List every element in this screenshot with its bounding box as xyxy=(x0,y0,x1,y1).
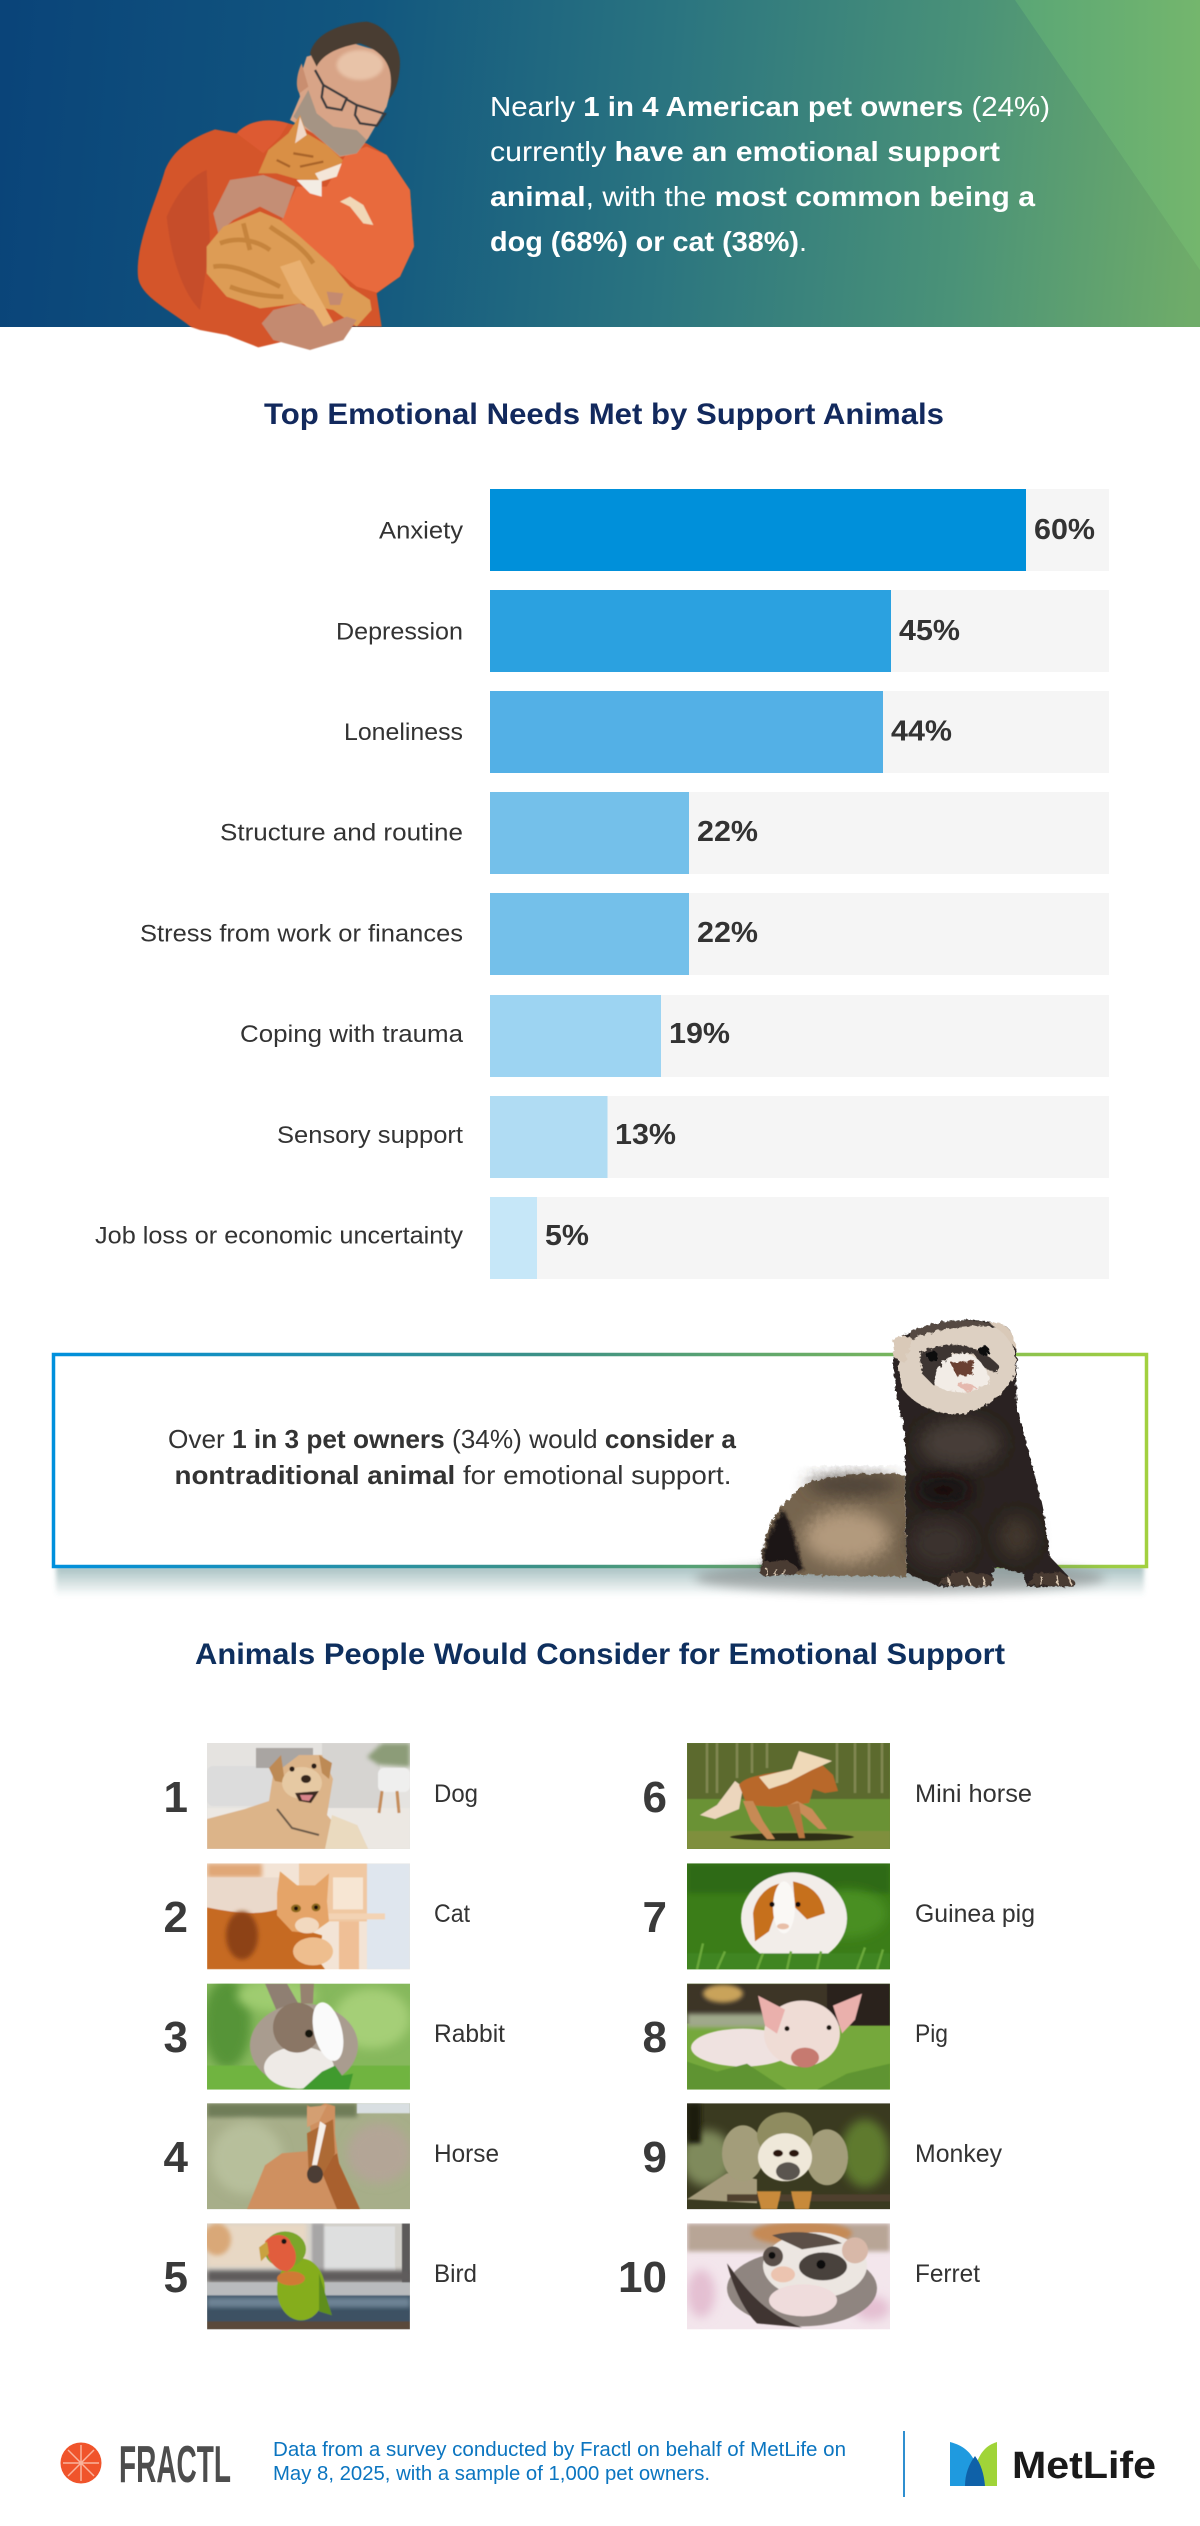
callout text: nontraditional animal for emotional support. xyxy=(174,1460,732,1490)
callout text xyxy=(168,1424,737,1490)
footer: Fractl logo: FRACTL xyxy=(119,2436,231,2494)
rank 8: pig: 8 xyxy=(643,2013,667,2062)
intro statement xyxy=(490,91,1050,257)
bar: structure and routine: Structure and routine xyxy=(220,820,463,847)
intro statement: currently have an emotional support xyxy=(490,136,1000,167)
bar: structure and routine: 22% xyxy=(697,816,758,848)
rank 4: horse xyxy=(164,2103,499,2209)
bar: stress: Stress from work or finances xyxy=(140,920,463,947)
bar: depression: 45% xyxy=(899,615,960,647)
rank 10: ferret xyxy=(618,2221,980,2329)
bar: anxiety: Anxiety xyxy=(379,518,464,544)
rank 3: rabbit xyxy=(164,1979,505,2090)
bar: sensory support: 13% xyxy=(615,1119,676,1151)
rank 5: bird: 5 xyxy=(164,2253,188,2302)
rank 4: horse: Horse xyxy=(434,2140,499,2168)
source note xyxy=(273,2439,846,2485)
bar: coping with trauma: 19% xyxy=(669,1018,730,1050)
hoodie xyxy=(138,120,414,347)
bar: coping with trauma xyxy=(240,995,1109,1077)
heading: animals people would consider: Animals People Would Consider for Emotional Support xyxy=(195,1638,1005,1671)
rank 3: rabbit: 3 xyxy=(164,2013,188,2062)
footer divider xyxy=(903,2431,905,2497)
neck and chest xyxy=(893,1320,1075,1587)
rank 10: ferret: Ferret xyxy=(915,2260,980,2288)
upper arm hand xyxy=(213,175,295,233)
photo: ferret xyxy=(760,1320,1075,1587)
bar: job loss: 5% xyxy=(545,1220,589,1252)
cat body xyxy=(207,212,372,327)
rank 10: ferret: 10 xyxy=(618,2253,667,2302)
paws xyxy=(760,1560,797,1576)
footer: Fractl logo xyxy=(60,2436,231,2494)
rank 2: cat: Cat xyxy=(434,1900,470,1928)
bar: depression xyxy=(336,590,1109,672)
rank 5: bird: Bird xyxy=(434,2260,477,2288)
callout box xyxy=(54,1354,1146,1566)
rank 4: horse: 4 xyxy=(164,2133,189,2182)
back body xyxy=(760,1474,907,1577)
rank 6: mini horse: Mini horse xyxy=(915,1780,1032,1808)
bar: anxiety xyxy=(379,489,1109,571)
ferret shadow xyxy=(695,1562,1105,1594)
rank 6: mini horse xyxy=(643,1743,1032,1849)
cat paw xyxy=(340,197,373,225)
rank 7: guinea pig: Guinea pig xyxy=(915,1900,1035,1928)
intro statement: dog (68%) or cat (38%) . xyxy=(490,226,807,257)
ranked animal list xyxy=(164,1743,1035,2329)
intro statement: animal , with the most common being a xyxy=(490,181,1036,212)
footer: MetLife logo: MetLife xyxy=(1012,2445,1156,2487)
bar: loneliness: 44% xyxy=(891,716,952,748)
bar: job loss: Job loss or economic uncertainty xyxy=(95,1222,464,1250)
rank 9: monkey xyxy=(643,2103,1002,2209)
rank 8: pig xyxy=(643,1984,948,2090)
bar: loneliness: Loneliness xyxy=(344,719,463,746)
head xyxy=(290,43,395,157)
bar: structure and routine xyxy=(220,792,1109,874)
rank 1: dog xyxy=(164,1743,478,1849)
rank 8: pig: Pig xyxy=(915,2020,948,2048)
lower hand xyxy=(262,303,357,350)
header banner xyxy=(0,0,1200,327)
source note: Data from a survey conducted by Fractl on behalf of MetLife on xyxy=(273,2439,846,2461)
rank 6: mini horse: 6 xyxy=(643,1773,667,1822)
heading: top emotional needs: Top Emotional Needs Met by Support Animals xyxy=(264,398,944,431)
rank 9: monkey: 9 xyxy=(643,2133,667,2182)
rank 3: rabbit: Rabbit xyxy=(434,2020,505,2048)
source note: May 8, 2025, with a sample of 1,000 pet owners. xyxy=(273,2463,710,2485)
rank 5: bird xyxy=(164,2223,477,2329)
rank 2: cat xyxy=(164,1863,470,1969)
cat head xyxy=(258,115,343,182)
footer: MetLife logo xyxy=(950,2442,1156,2487)
bar: loneliness xyxy=(344,691,1109,773)
bar: anxiety: 60% xyxy=(1034,514,1095,546)
intro statement: Nearly 1 in 4 American pet owners (24%) xyxy=(490,91,1050,122)
bar: sensory support xyxy=(277,1096,1109,1178)
bar: stress: 22% xyxy=(697,917,758,949)
callout text: Over 1 in 3 pet owners (34%) would consider a xyxy=(168,1424,737,1454)
rank 2: cat: 2 xyxy=(164,1893,188,1942)
bar: depression: Depression xyxy=(336,618,463,645)
rank 7: guinea pig: 7 xyxy=(643,1893,667,1942)
callout shadow xyxy=(56,1566,1144,1596)
bar: coping with trauma: Coping with trauma xyxy=(240,1021,463,1048)
face xyxy=(898,1324,1016,1414)
rank 1: dog: Dog xyxy=(434,1780,478,1808)
rank 9: monkey: Monkey xyxy=(915,2140,1002,2168)
bar: sensory support: Sensory support xyxy=(277,1122,463,1149)
bar chart: emotional needs xyxy=(95,489,1109,1279)
rank 1: dog: 1 xyxy=(164,1773,188,1822)
bar: job loss xyxy=(95,1197,1109,1279)
photo: man holding orange cat xyxy=(138,22,414,350)
rank 7: guinea pig xyxy=(643,1863,1035,1969)
bar: stress xyxy=(140,893,1109,975)
icon: MetLife M xyxy=(950,2442,997,2486)
icon: Fractl burst xyxy=(60,2442,102,2484)
